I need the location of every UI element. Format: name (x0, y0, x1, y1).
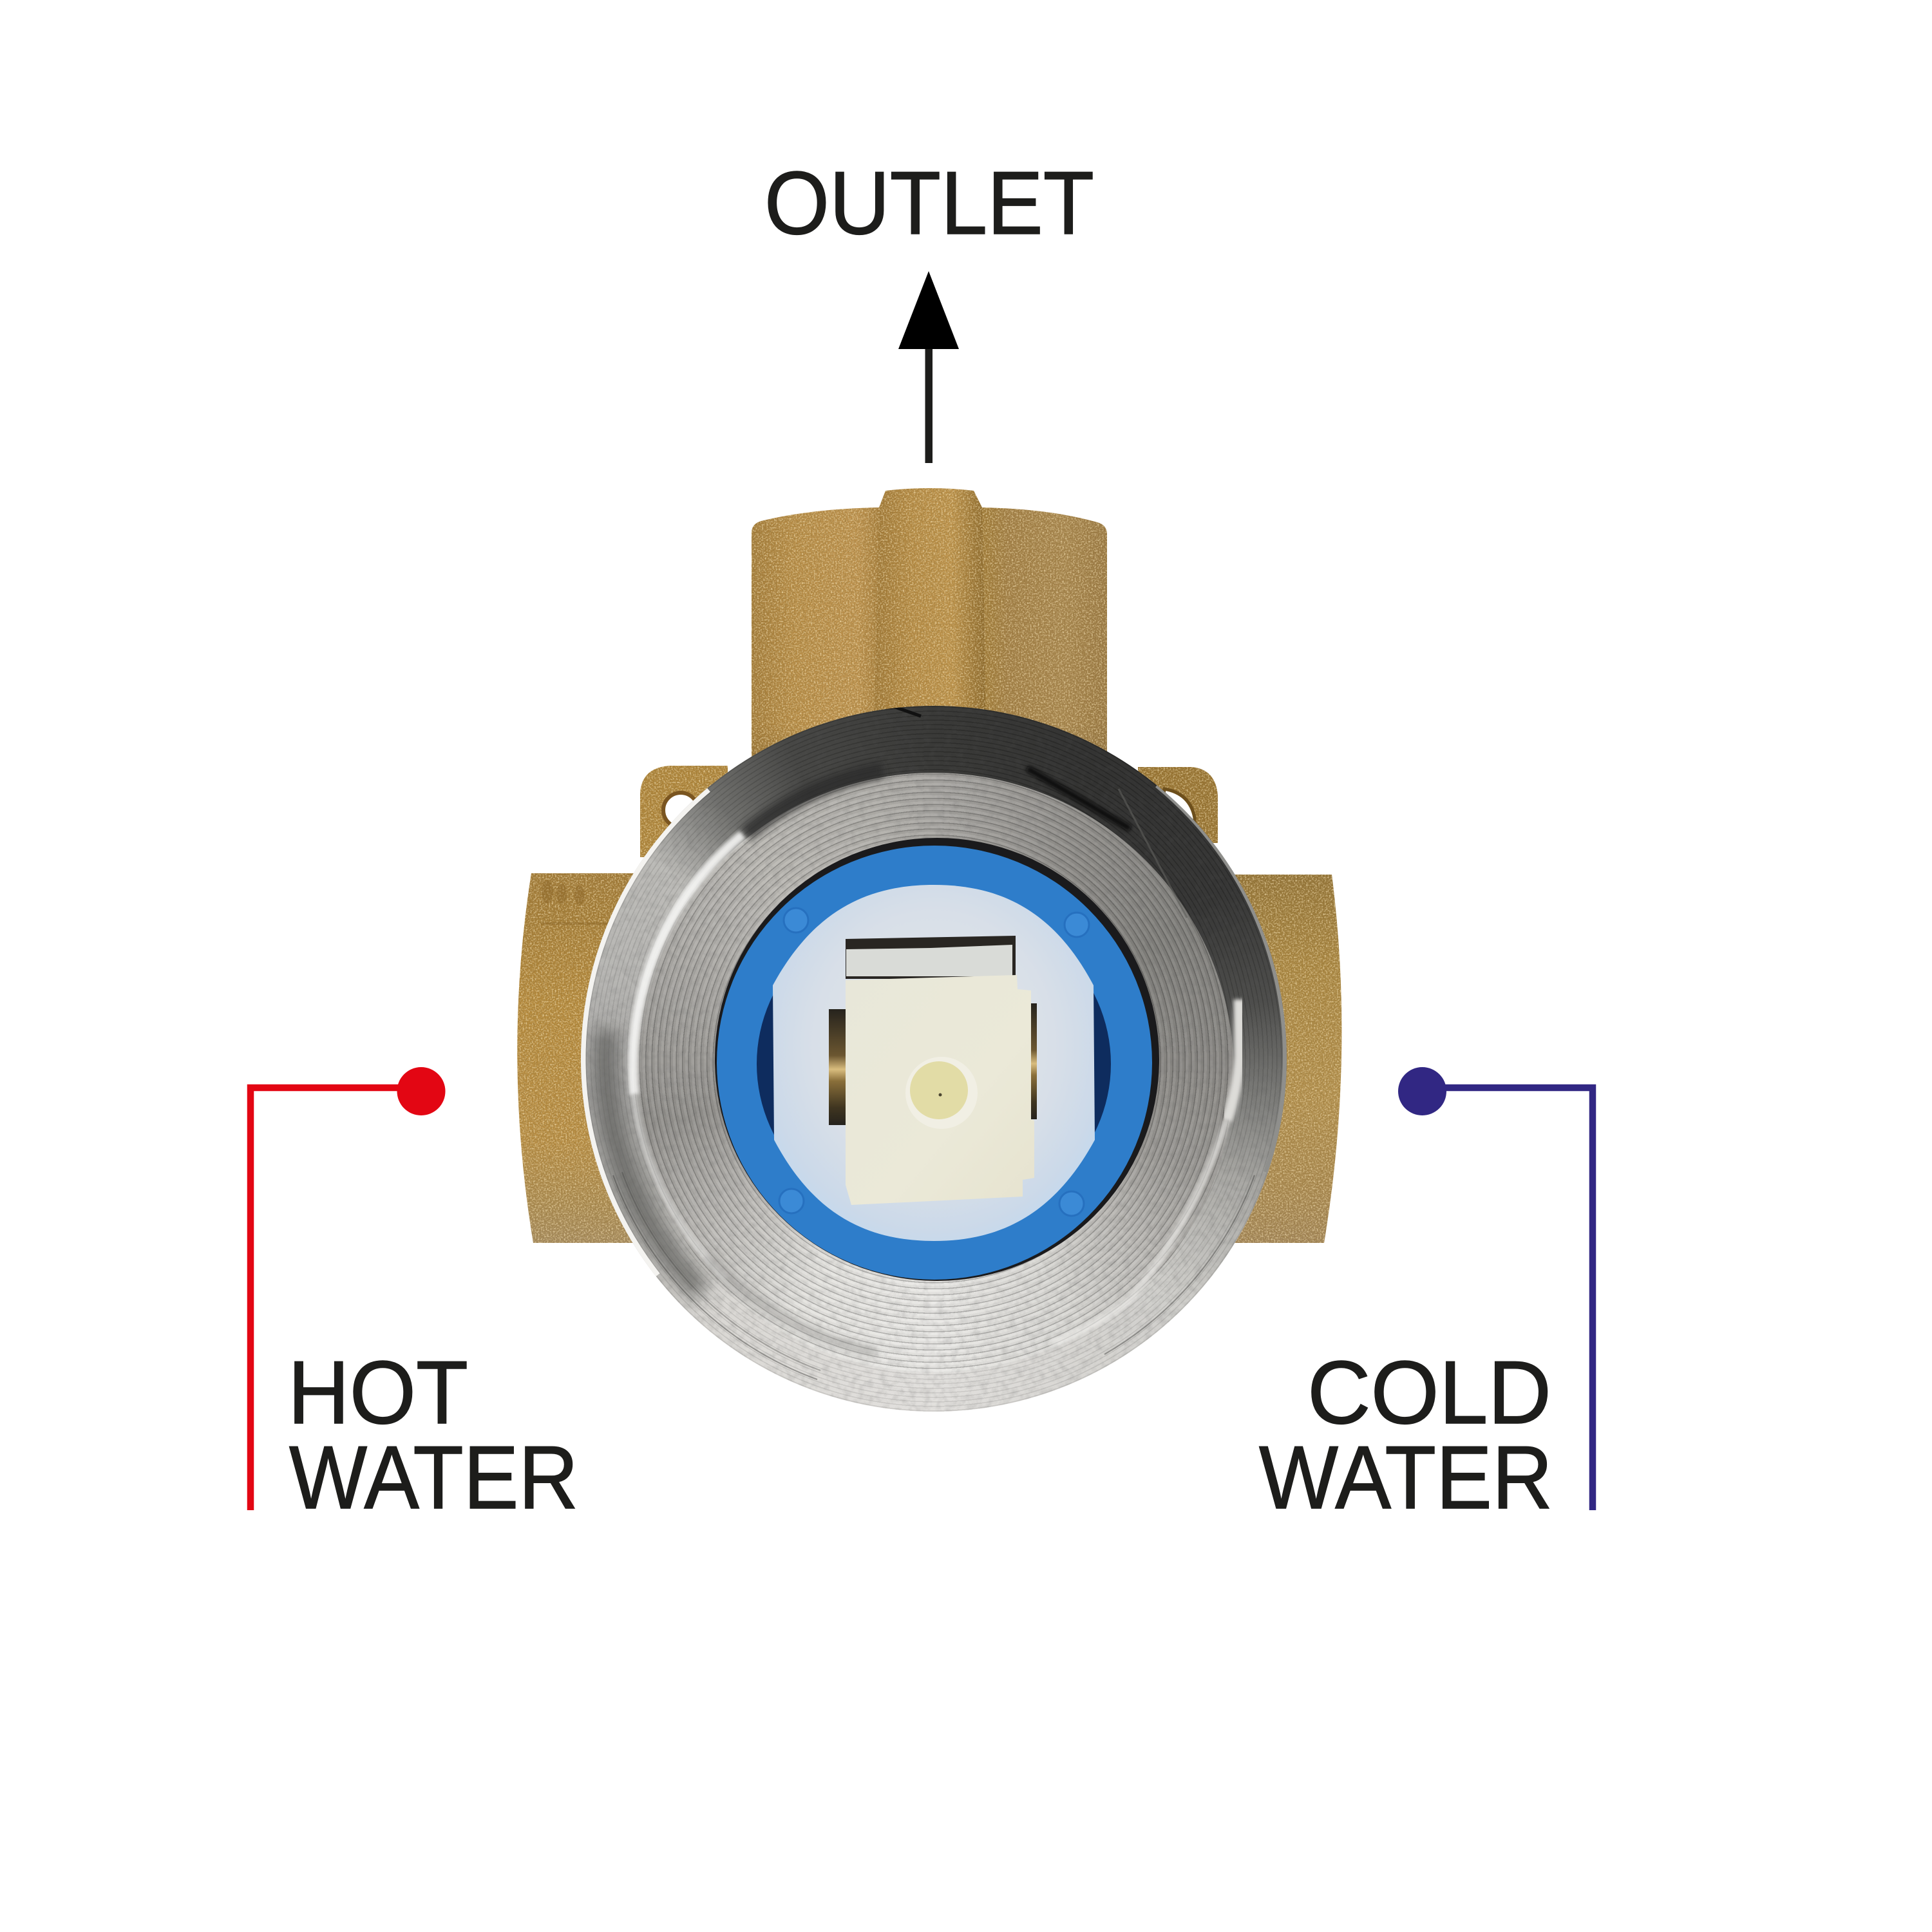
cream square spindle (846, 975, 1034, 1205)
label: cold water: WATER (1259, 1428, 1553, 1528)
dark seat behind blue ring (715, 838, 1159, 1281)
ring screws (779, 908, 1089, 1216)
brass valve body with three ports and mounting brackets (517, 488, 1342, 1243)
label: hot water: WATER (289, 1428, 578, 1528)
inner dark blue recess (757, 900, 1111, 1228)
left mounting bracket (640, 766, 728, 857)
right slot with brass spindle (1030, 1003, 1037, 1119)
outlet port (top) (752, 488, 1107, 805)
spindle centre hole (905, 1057, 978, 1129)
cold water connector (1398, 1067, 1593, 1510)
threaded metal collar (581, 706, 1287, 1412)
collar thread rings (634, 773, 1234, 1373)
label: outlet: OUTLET (764, 153, 1094, 253)
label: hot water: HOT (288, 1343, 468, 1443)
hot water port (left) (517, 873, 715, 1243)
label: cold water: COLD (1307, 1343, 1551, 1443)
collar detail, blue ring and cartridge (581, 707, 1287, 1412)
cartridge upper block (846, 936, 1016, 979)
label: hot water (288, 1343, 578, 1528)
bracket holes (663, 789, 1195, 837)
label: cold water (1259, 1343, 1553, 1528)
blue retaining ring (717, 846, 1152, 1280)
casting marks on hot port (541, 880, 618, 925)
pale cartridge disc (773, 885, 1095, 1241)
left slot with brass spindle (829, 1009, 846, 1125)
right mounting bracket (1138, 767, 1218, 843)
valve photograph illustration (517, 488, 1342, 1412)
hot water connector (251, 1067, 446, 1510)
arrow: outlet flow (898, 271, 959, 463)
collar shading streaks (581, 706, 1287, 1412)
cold water port (right) (1146, 875, 1341, 1243)
